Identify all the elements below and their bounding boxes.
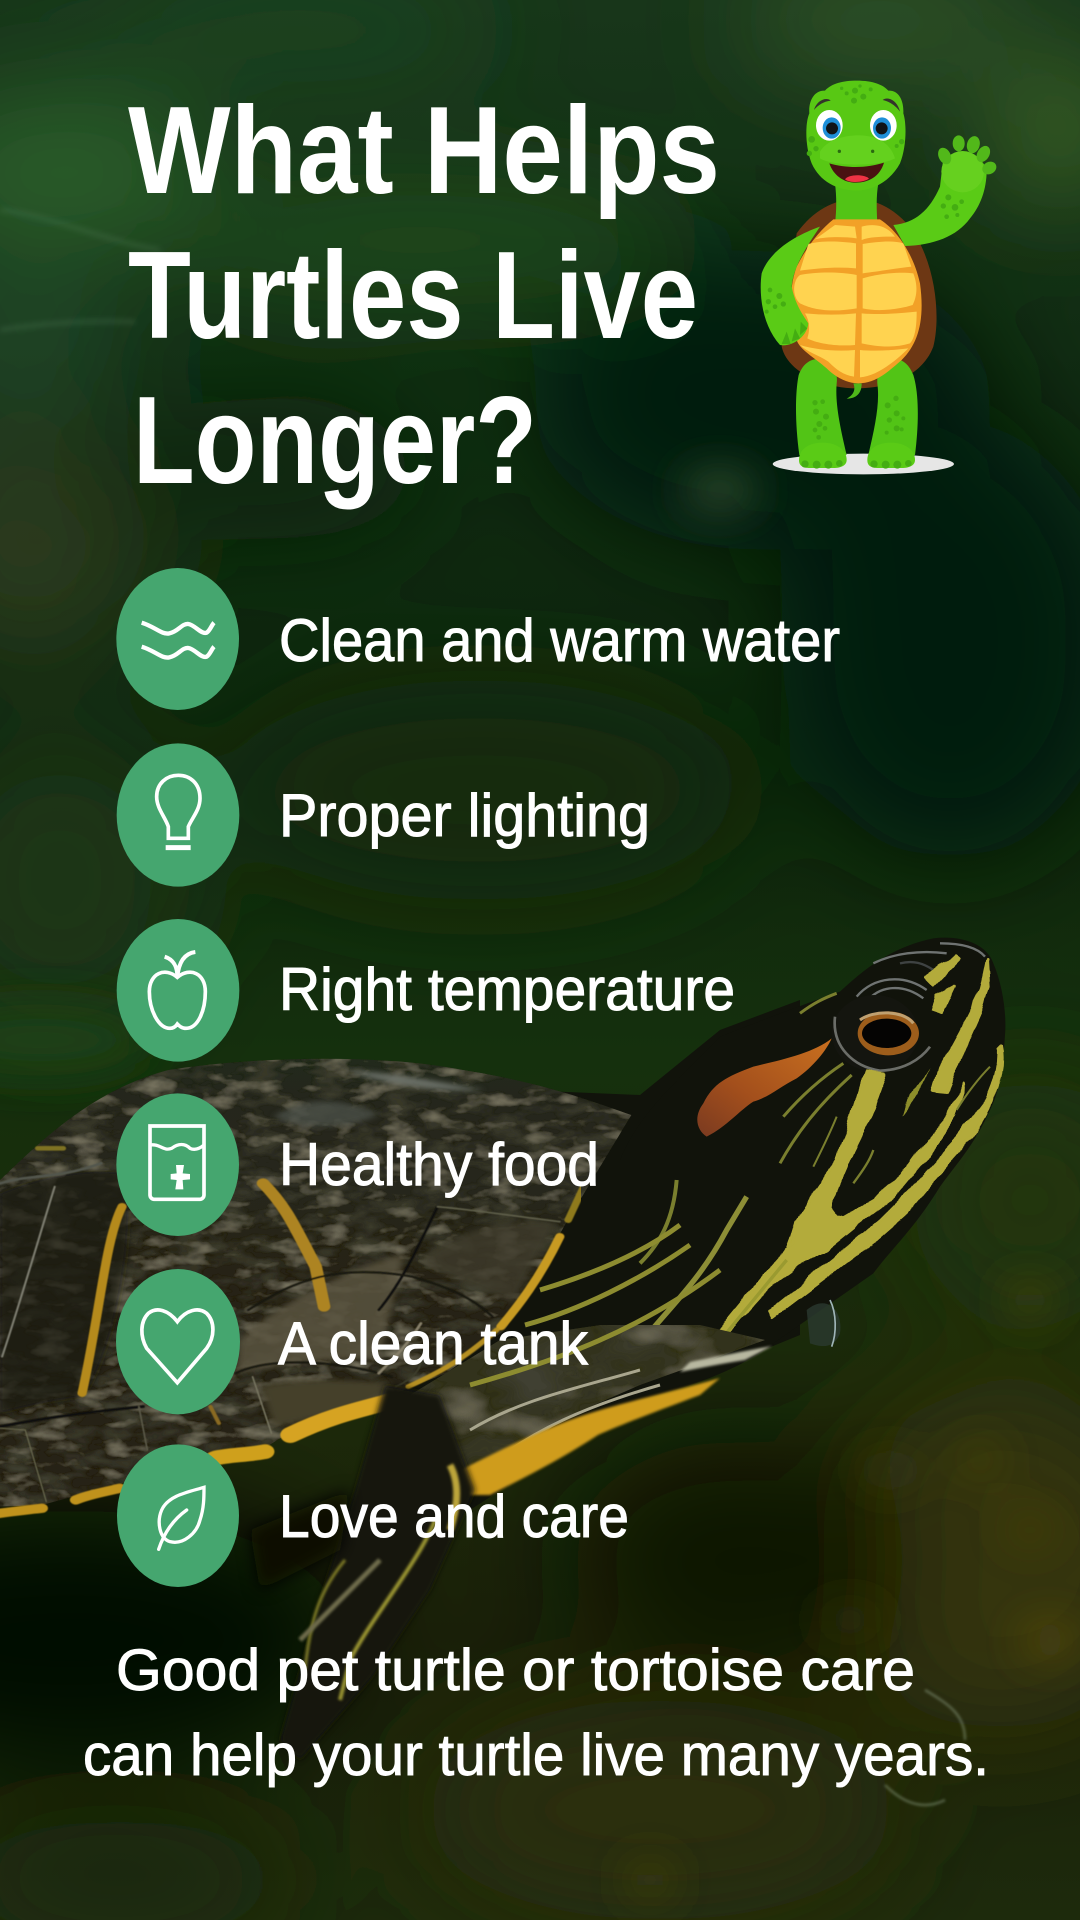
orange head stripe [697, 1038, 832, 1137]
brow ridges [857, 943, 985, 1002]
icon: apple [117, 919, 239, 1062]
item 3: right temperature [117, 919, 735, 1062]
icon: cartoon turtle mascot [761, 81, 999, 474]
item 1: clean and warm water: Clean and warm water [279, 607, 840, 674]
icon: tank [116, 1093, 239, 1236]
item 6: love and care [117, 1444, 629, 1587]
title: What Helps [128, 82, 720, 220]
item 5: a clean tank: A clean tank [278, 1310, 589, 1377]
front flipper [250, 1385, 475, 1760]
yellow head stripes [705, 957, 1003, 1355]
caption: Good pet turtle or tortoise care [116, 1638, 915, 1703]
item 6: love and care: Love and care [279, 1483, 629, 1550]
caption [83, 1638, 989, 1788]
turtle head [620, 938, 1005, 1400]
ground shadow [773, 454, 954, 474]
item 1: clean and warm water [116, 568, 840, 710]
item 4: healthy food [116, 1093, 599, 1236]
icon: light bulb [117, 743, 239, 887]
eye [832, 995, 930, 1072]
olive neck stripes [640, 993, 990, 1357]
turtle shell [0, 1059, 648, 1513]
eyes [816, 110, 843, 141]
turtle neck base [370, 1000, 800, 1510]
plastron yellow band [455, 1346, 772, 1495]
mouth [829, 163, 884, 183]
title: Turtles Live [128, 227, 698, 365]
title: Longer? [133, 372, 537, 510]
turtle neck mottled underside [410, 1225, 765, 1490]
item 4: healthy food: Healthy food [279, 1131, 599, 1198]
neck [835, 183, 878, 223]
waving arm [893, 135, 999, 246]
item 2: proper lighting [117, 743, 650, 887]
item 2: proper lighting: Proper lighting [279, 782, 650, 849]
left arm (viewer) [761, 227, 820, 345]
item 5: a clean tank [116, 1269, 589, 1414]
icon: waves [116, 568, 239, 710]
plastron scutes [794, 225, 917, 377]
shell back [782, 198, 937, 388]
icon: heart [116, 1269, 240, 1414]
tail [847, 383, 862, 399]
shell yellow rim [0, 1237, 560, 1513]
item 3: right temperature: Right temperature [279, 956, 735, 1023]
legs [796, 359, 918, 469]
title [128, 82, 720, 510]
photo: red-eared slider turtle [0, 938, 1005, 1760]
caption: can help your turtle live many years. [83, 1723, 989, 1788]
icon: leaf [117, 1444, 239, 1587]
head [806, 81, 906, 191]
submerged rear foot [807, 1303, 840, 1346]
plastron [791, 219, 922, 383]
